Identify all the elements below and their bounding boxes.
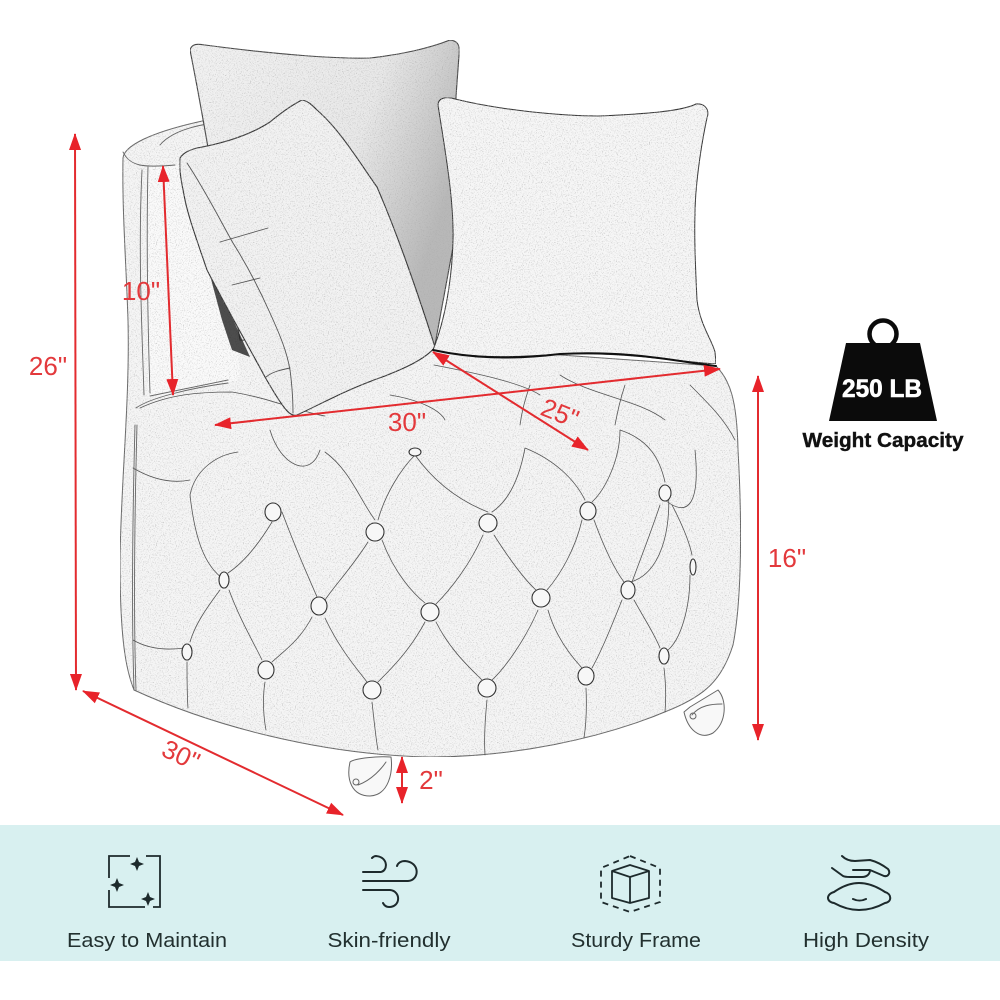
tufted buttons [182,448,696,699]
right pillow [433,98,716,366]
back pillow [190,40,459,350]
dimension labels: 30" [157,733,205,777]
label: Easy to Maintain [67,930,227,952]
inner back panel [147,163,240,398]
dimension labels: 10" [122,276,160,306]
arrow: chair width [83,691,343,815]
dimension arrows [75,134,758,815]
chair back and body [120,120,741,757]
feature band [0,825,1000,961]
weight value: 250 LB [842,375,922,403]
arrow: seat height [757,376,759,740]
arrow: leg height [401,757,403,803]
label: Sturdy Frame [571,930,701,952]
arrow: back height [163,166,173,395]
icon: wind [363,856,417,907]
feature: easy to maintain [67,856,227,952]
seat top and tufting [133,365,735,755]
caster wheels [349,690,724,796]
weight capacity badge [802,320,964,452]
chair illustration [120,40,741,796]
label: High Density [803,930,929,952]
feature: skin-friendly [328,856,450,952]
icon: kettlebell weight [829,320,937,421]
dimension labels: 30" [388,407,426,437]
left pillow [180,100,435,415]
feature: sturdy frame [571,856,701,952]
weight caption: Weight Capacity [802,430,964,452]
arrow: seat depth [433,352,588,450]
label: Skin-friendly [328,930,450,952]
icon: sparkle frame [109,856,160,907]
feature: high density [803,856,929,952]
arrow: overall height [75,134,76,690]
icon: hand over foam [828,856,890,910]
dark shadow between pillows [208,268,250,357]
dimension labels: 26" [29,351,67,381]
dimension labels [29,276,806,795]
arrow: seat width [215,369,720,425]
dimension labels: 25" [537,392,583,434]
dimension labels: 2" [419,765,443,795]
icon: dashed cube [601,856,660,912]
dimension labels: 16" [768,543,806,573]
